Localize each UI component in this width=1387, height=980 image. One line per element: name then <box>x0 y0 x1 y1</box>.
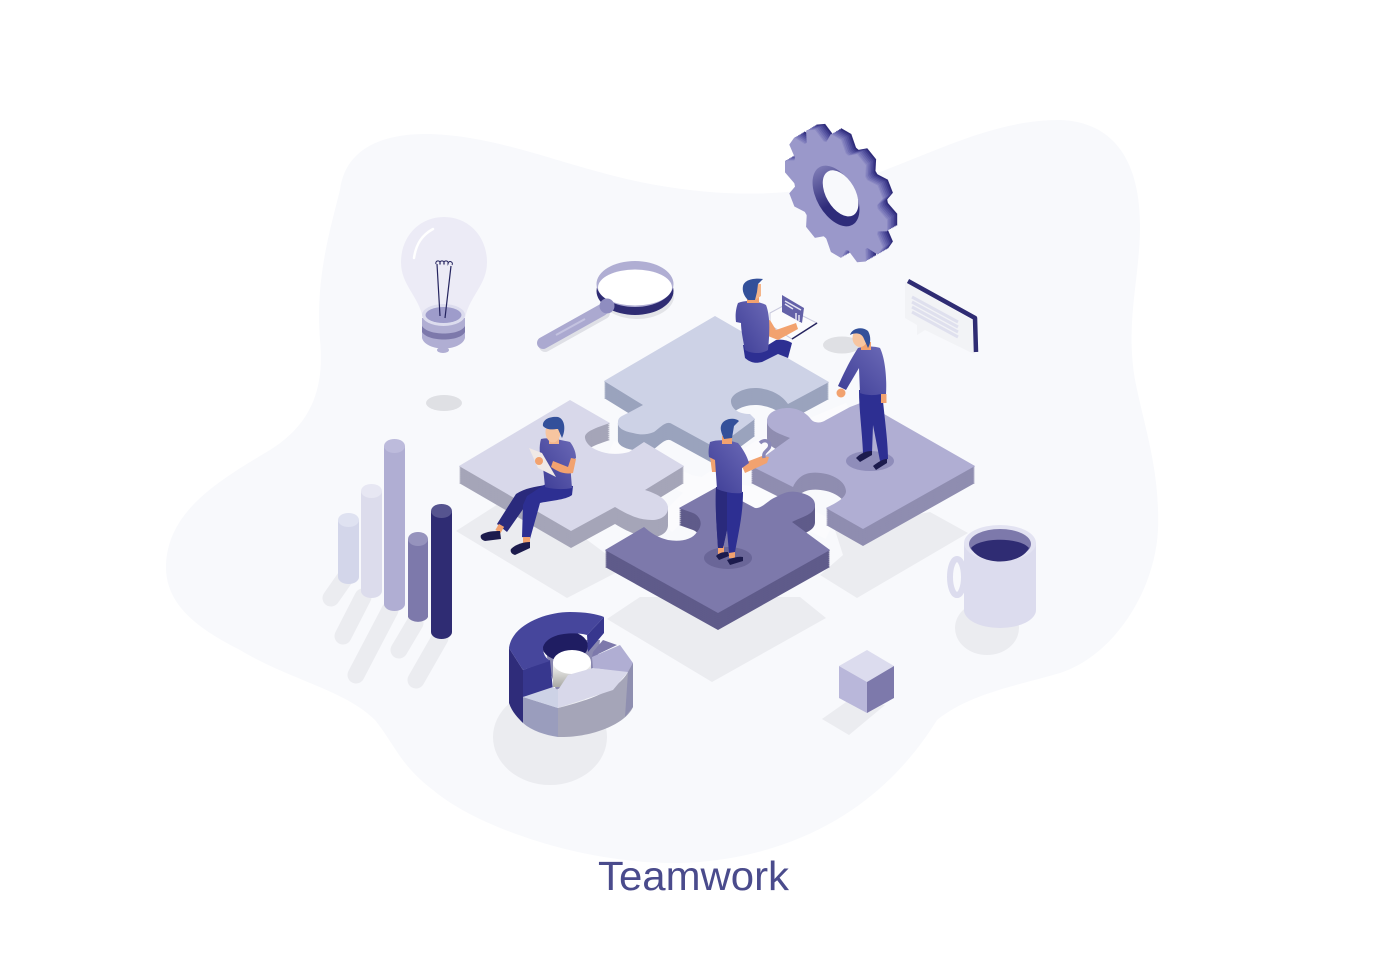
puzzle piece: left <box>459 400 684 548</box>
person: sitting with laptop <box>736 279 817 363</box>
grey floor ellipse <box>823 336 861 354</box>
icon: light bulb <box>401 217 487 353</box>
bar 3 <box>384 439 405 611</box>
background blob <box>166 120 1158 863</box>
white gaps between puzzle pieces <box>610 412 850 530</box>
bulb floor shadow <box>426 395 462 411</box>
floor shadows under puzzle <box>456 490 968 682</box>
bar 4 <box>408 532 428 622</box>
donut chart <box>493 612 633 785</box>
icon: magnifying glass <box>543 261 674 346</box>
puzzle piece: top <box>604 316 829 465</box>
puzzle piece: bottom <box>605 487 830 630</box>
icon: laptop <box>770 295 817 339</box>
bar chart cylinders <box>331 439 452 680</box>
bar 5 <box>431 504 452 639</box>
person: seated with clipboard <box>481 417 576 555</box>
title: Teamwork <box>598 853 790 899</box>
bar 1 <box>338 513 359 584</box>
person: standing on bottom piece <box>704 419 770 569</box>
person: standing on right piece <box>836 328 894 471</box>
icon: speech bubble <box>905 281 976 354</box>
icon: question mark <box>760 441 770 458</box>
icon: coffee mug <box>950 525 1036 655</box>
icon: gear <box>785 96 897 290</box>
puzzle piece: right <box>751 402 975 546</box>
icon: cube <box>822 650 894 735</box>
bar 2 <box>361 484 382 598</box>
